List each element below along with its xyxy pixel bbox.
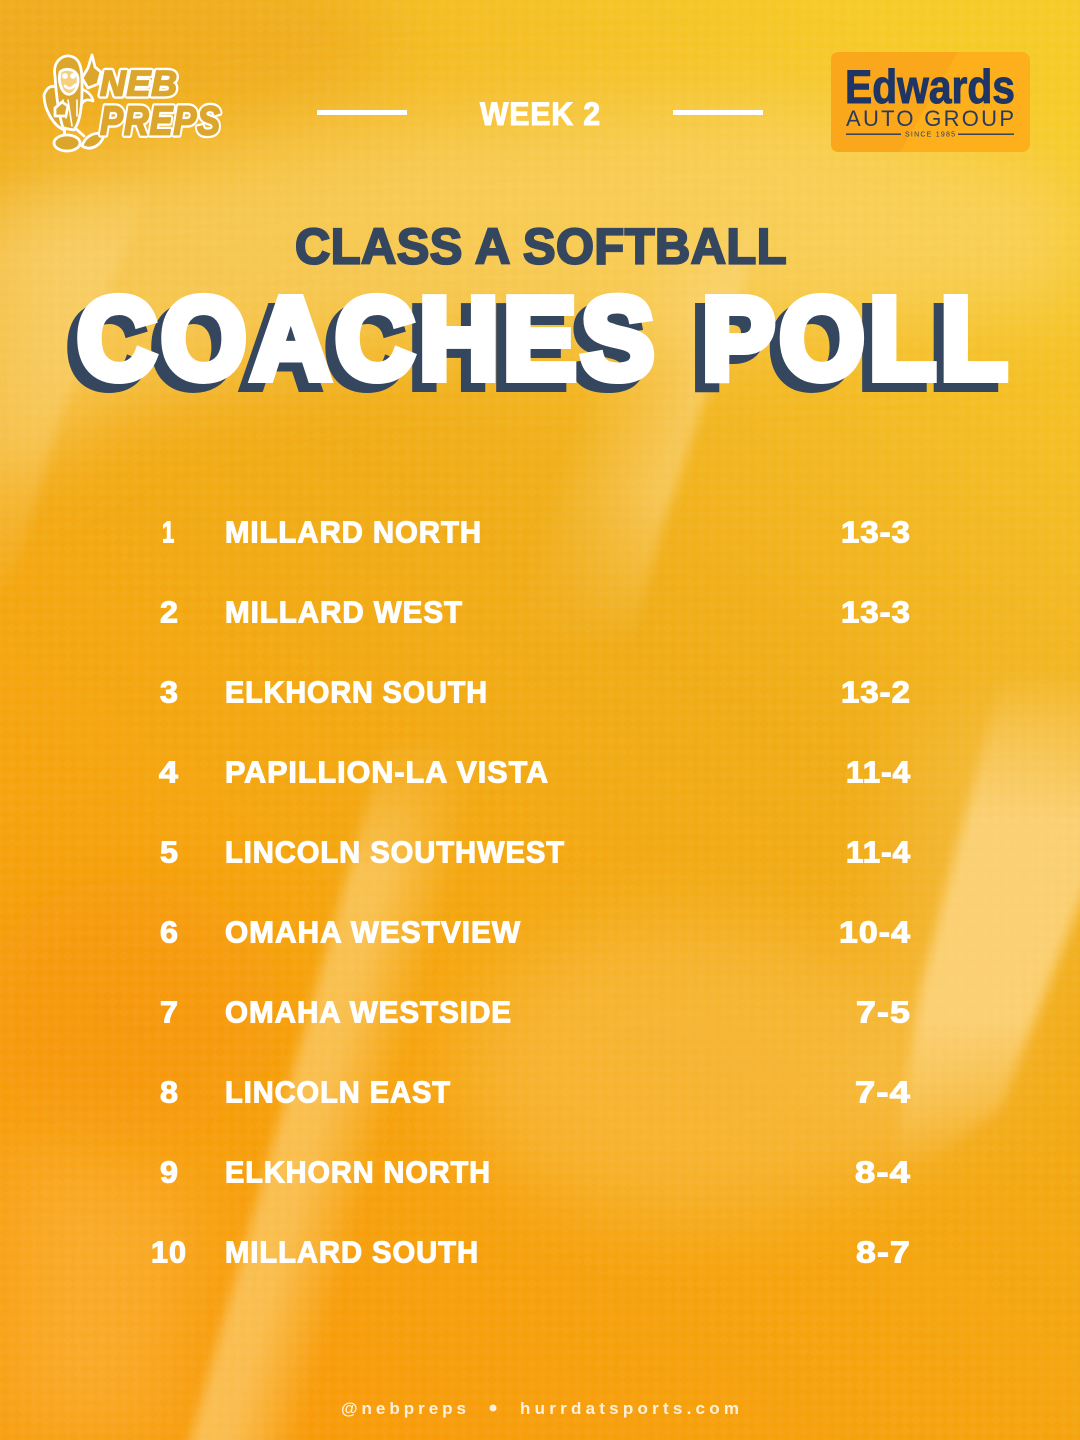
logo: Edwards Auto Group: SINCE 1985 (905, 132, 955, 138)
logo: Edwards Auto Group: AUTO GROUP (846, 106, 1014, 131)
row 5: 11-4 (846, 834, 911, 870)
title shadow: COACHES (67, 282, 649, 412)
row 4: PAPILLION-LA VISTA (225, 754, 549, 790)
subtitle: CLASS A SOFTBALL (295, 218, 787, 274)
row 2: MILLARD WEST (225, 594, 463, 630)
row 7 (160, 994, 911, 1030)
row 10 (151, 1234, 911, 1270)
row 4: 4 (159, 754, 179, 790)
row 10: 10 (151, 1234, 187, 1270)
wordmark: PREPS (100, 98, 221, 144)
row 7: 7-5 (856, 994, 911, 1030)
row 4 (159, 754, 911, 790)
row 10: 8-7 (856, 1234, 911, 1270)
row 3: 3 (160, 674, 179, 710)
row 3 (160, 674, 911, 710)
rankings table (151, 514, 911, 1270)
footer: hurrdatsports.com (520, 1399, 739, 1418)
row 5: LINCOLN SOUTHWEST (225, 834, 565, 870)
row 6: 6 (160, 914, 179, 950)
row 5 (160, 834, 911, 870)
row 3: 13-2 (841, 674, 911, 710)
row 9 (160, 1154, 911, 1190)
row 5: 5 (160, 834, 179, 870)
row 4: 11-4 (846, 754, 911, 790)
row 6: OMAHA WESTVIEW (225, 914, 521, 950)
logo: Edwards Auto Group (831, 52, 1030, 152)
title (67, 274, 1012, 412)
row 8 (160, 1074, 911, 1110)
title shadow: POLL (692, 282, 1002, 412)
row 2: 2 (160, 594, 179, 630)
icon: corn mascot (44, 55, 104, 151)
row 2: 13-3 (841, 594, 911, 630)
logo: Edwards Auto Group: Edwards (845, 60, 1015, 113)
footer (341, 1399, 739, 1418)
footer: @nebpreps (341, 1399, 466, 1418)
row 8: 8 (160, 1074, 179, 1110)
row 6 (160, 914, 911, 950)
row 1: MILLARD NORTH (225, 514, 482, 550)
title face (77, 274, 1012, 404)
row 1: 1 (162, 514, 175, 550)
logo: Neb Preps (44, 55, 221, 151)
row 2 (160, 594, 911, 630)
title face: COACHES (77, 274, 659, 404)
title shadow (67, 282, 1002, 412)
week label: WEEK 2 (480, 96, 601, 132)
row 6: 10-4 (839, 914, 911, 950)
row 1 (162, 514, 911, 550)
wordmark: NEB (100, 64, 178, 104)
row 3: ELKHORN SOUTH (225, 674, 488, 710)
row 1: 13-3 (841, 514, 911, 550)
row 9: 8-4 (855, 1154, 911, 1190)
wordmark: NEB (100, 64, 178, 104)
title face: POLL (702, 274, 1012, 404)
row 7: 7 (160, 994, 179, 1030)
row 9: 9 (160, 1154, 179, 1190)
wordmark (100, 64, 221, 144)
row 9: ELKHORN NORTH (225, 1154, 491, 1190)
row 7: OMAHA WESTSIDE (225, 994, 512, 1030)
wordmark: PREPS (100, 98, 221, 144)
row 8: LINCOLN EAST (225, 1074, 451, 1110)
week header (317, 96, 763, 132)
row 8: 7-4 (855, 1074, 911, 1110)
row 10: MILLARD SOUTH (225, 1234, 479, 1270)
